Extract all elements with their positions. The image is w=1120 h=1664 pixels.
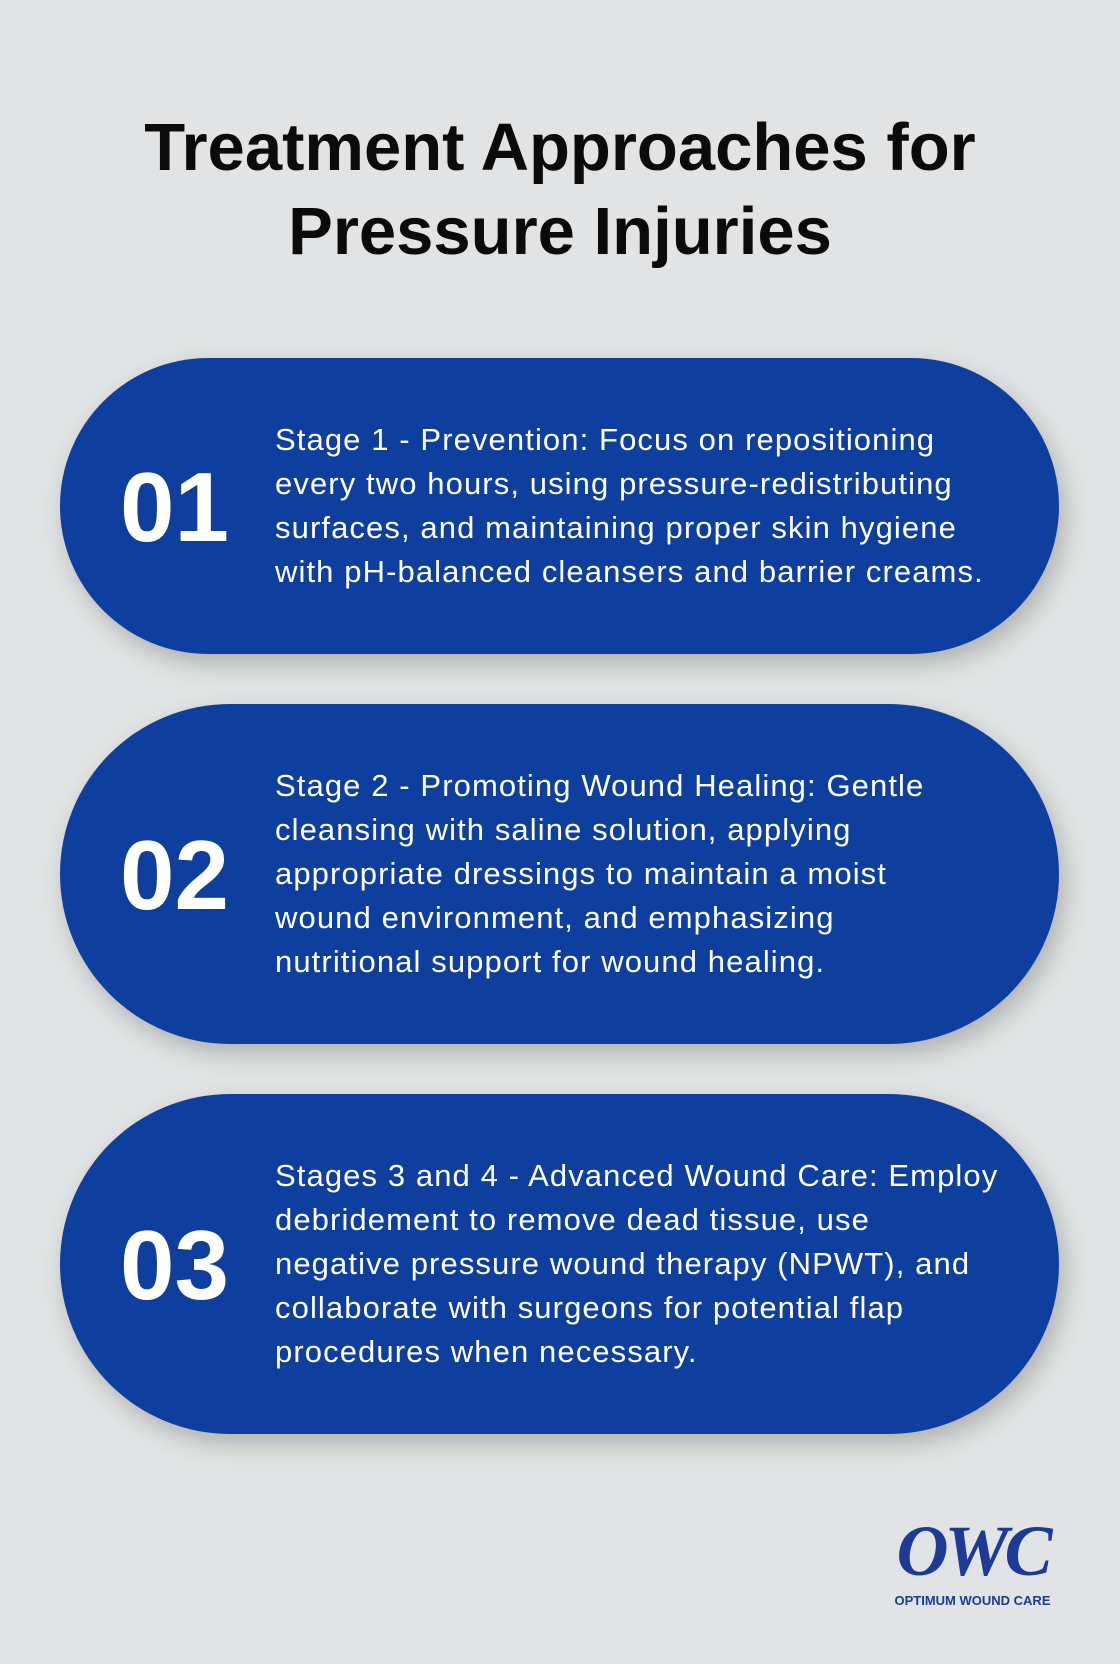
text: stage 3 and 4: collaborate with surgeons for potential flap xyxy=(275,1290,904,1325)
text: stage 1: with pH-balanced cleansers and barrier creams. xyxy=(275,554,984,589)
text: stage 3 and 4: Stages 3 and 4 - Advanced Wound Care: Employ xyxy=(275,1158,998,1193)
number 02: 02 xyxy=(120,820,229,930)
panel: stage 3 and 4 xyxy=(60,1094,1059,1434)
text: stage 3 and 4: negative pressure wound therapy (NPWT), and xyxy=(275,1246,970,1281)
panel: stage 1 xyxy=(60,358,1059,654)
text: stage 2: nutritional support for wound healing. xyxy=(275,944,825,979)
text: stage 1: surfaces, and maintaining proper skin hygiene xyxy=(275,510,957,545)
text: stage 3 and 4: debridement to remove dead tissue, use xyxy=(275,1202,870,1237)
title: Treatment Approaches for xyxy=(144,110,976,185)
logo: OWC xyxy=(896,1511,1049,1591)
text: stage 2: cleansing with saline solution, applying xyxy=(275,812,852,847)
logo: OPTIMUM WOUND CARE xyxy=(894,1593,1050,1608)
text: stage 3 and 4 xyxy=(275,1158,998,1369)
number 03: 03 xyxy=(120,1210,229,1320)
text: stage 2: appropriate dressings to maintain a moist xyxy=(275,856,887,891)
text: stage 2: wound environment, and emphasizing xyxy=(275,900,835,935)
text: stage 2 xyxy=(275,768,924,979)
text: stage 1: every two hours, using pressure-redistributing xyxy=(275,466,953,501)
text: stage 3 and 4: procedures when necessary. xyxy=(275,1334,698,1369)
text: stage 1 xyxy=(275,422,984,589)
panel: stage 2 xyxy=(60,704,1059,1044)
title xyxy=(144,110,976,269)
number 01: 01 xyxy=(120,452,229,562)
text: stage 1: Stage 1 - Prevention: Focus on repositioning xyxy=(275,422,935,457)
text: stage 2: Stage 2 - Promoting Wound Healing: Gentle xyxy=(275,768,924,803)
title: Pressure Injuries xyxy=(288,194,832,269)
